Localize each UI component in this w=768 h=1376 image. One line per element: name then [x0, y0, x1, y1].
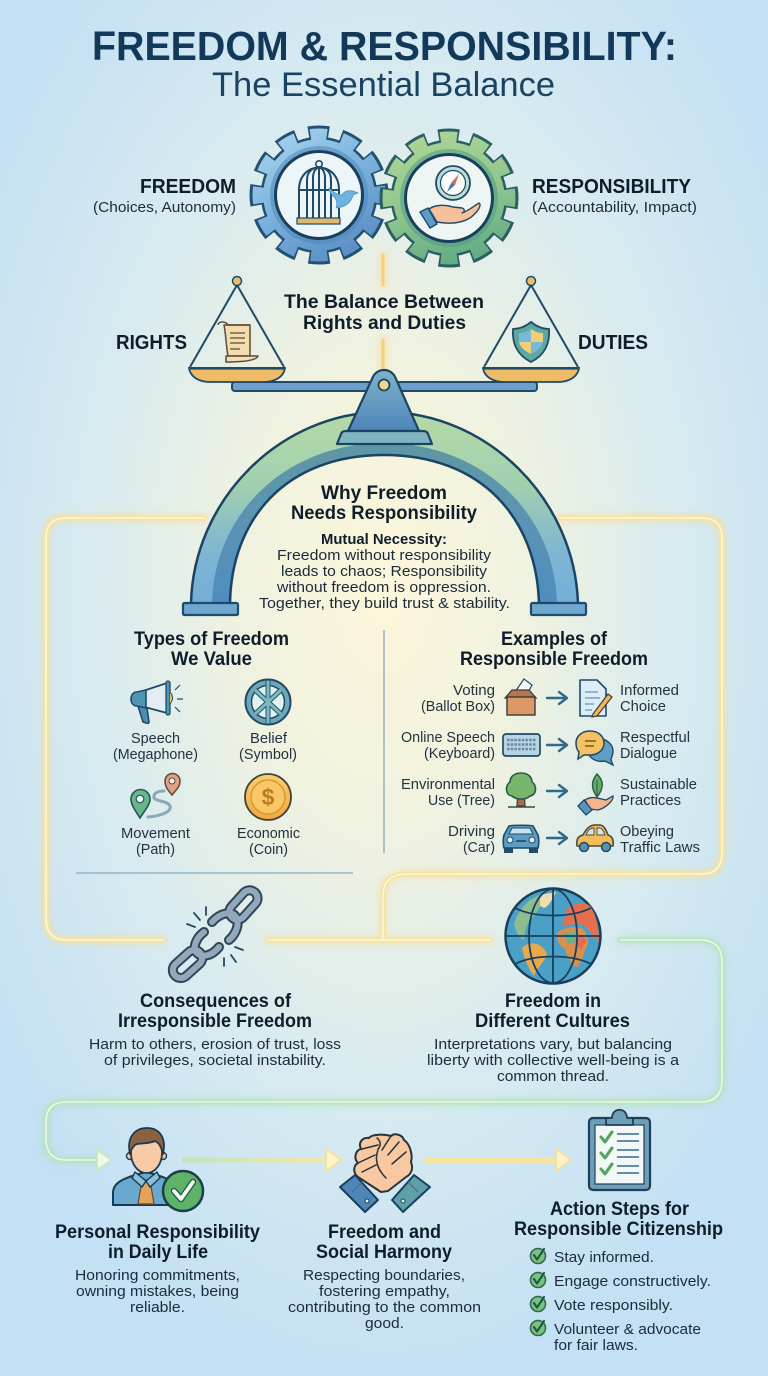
- icon: globe: [506, 888, 600, 984]
- row: driving: Traffic Laws: [620, 840, 700, 856]
- row: driving: (Car): [463, 840, 495, 856]
- text: why freedom needs responsibility: Together, they build trust & stability.: [259, 595, 510, 612]
- text: personal responsibility: owning mistakes, being: [76, 1283, 239, 1300]
- arch foot left: [183, 603, 238, 615]
- label: responsibility: [532, 176, 697, 216]
- text: freedom in different cultures: Different Cultures: [475, 1011, 630, 1032]
- panel: examples of responsible freedom: [401, 629, 700, 856]
- text: action steps: Responsible Citizenship: [514, 1219, 723, 1240]
- gear: freedom: [258, 134, 380, 256]
- right pan: [483, 276, 579, 382]
- title: FREEDOM & RESPONSIBILITY:: [92, 23, 677, 69]
- row: online speech: Respectful: [620, 730, 690, 746]
- checklist: Engage constructively.: [554, 1273, 711, 1290]
- label: movement: (Path): [136, 842, 175, 858]
- text: freedom and social harmony: contributing to the common: [288, 1299, 481, 1316]
- fulcrum: [337, 370, 432, 444]
- left pan: [189, 276, 285, 382]
- connector glow: green path and arrows: [46, 940, 722, 1171]
- label: movement: Movement: [121, 826, 190, 842]
- beam: [232, 382, 537, 391]
- text: freedom in different cultures: liberty with collective well-being is a: [427, 1052, 680, 1069]
- icon: coin: [245, 774, 291, 820]
- heading: Examples of: [501, 629, 608, 650]
- label: economic: Economic: [237, 826, 300, 842]
- text: why freedom needs responsibility: [259, 483, 510, 612]
- row: voting: Informed: [620, 683, 679, 699]
- row: voting: [421, 679, 679, 717]
- label: responsibility: RESPONSIBILITY: [532, 176, 692, 198]
- label: responsibility: (Accountability, Impact): [532, 199, 697, 216]
- checklist: Volunteer & advocate: [554, 1321, 701, 1338]
- row: driving: Obeying: [620, 824, 674, 840]
- text: why freedom needs responsibility: without freedom is oppression.: [276, 579, 491, 596]
- label: speech: [113, 731, 198, 763]
- text: personal responsibility: Personal Responsibility: [55, 1222, 260, 1243]
- row: online speech: (Keyboard): [424, 746, 495, 762]
- label: freedom: (Choices, Autonomy): [93, 199, 236, 216]
- row: voting: Voting: [453, 683, 495, 699]
- text: freedom and social harmony: Social Harmony: [316, 1242, 452, 1263]
- checklist: [530, 1248, 711, 1354]
- row: environmental use: Sustainable: [620, 777, 697, 793]
- checklist: Vote responsibly.: [554, 1297, 673, 1314]
- heading: balance: The Balance Between: [284, 292, 484, 313]
- text: freedom and social harmony: good.: [365, 1315, 404, 1332]
- icon: handshake: [340, 1134, 430, 1212]
- text: freedom in different cultures: Freedom in: [505, 991, 601, 1012]
- row: environmental use: Practices: [620, 793, 681, 809]
- heading: Types of Freedom: [134, 629, 289, 650]
- label: movement: [121, 826, 190, 858]
- icon: shield: [513, 322, 549, 362]
- title: The Essential Balance: [212, 66, 555, 104]
- connector glow: yellow paths: [46, 255, 722, 940]
- text: action steps: Action Steps for: [550, 1199, 690, 1220]
- text: consequences of irresponsible freedom: [89, 991, 341, 1069]
- heading: balance: Rights and Duties: [303, 313, 466, 334]
- text: consequences of irresponsible freedom: Irresponsible Freedom: [118, 1011, 312, 1032]
- icon: broken chain: [170, 887, 261, 981]
- icon: path with pins: [131, 774, 180, 818]
- text: action steps: [514, 1199, 723, 1354]
- label: economic: (Coin): [249, 842, 288, 858]
- row: driving: Driving: [448, 824, 495, 840]
- heading: We Value: [171, 649, 252, 670]
- checklist: for fair laws.: [554, 1337, 638, 1354]
- text: consequences of irresponsible freedom: of privileges, societal instability.: [104, 1052, 326, 1069]
- text: why freedom needs responsibility: Mutual Necessity:: [321, 531, 447, 548]
- text: consequences of irresponsible freedom: Consequences of: [140, 991, 292, 1012]
- label: freedom: [93, 176, 236, 216]
- text: consequences of irresponsible freedom: Harm to others, erosion of trust, loss: [89, 1036, 341, 1053]
- text: freedom and social harmony: fostering empathy,: [319, 1283, 450, 1300]
- label: speech: Speech: [131, 731, 180, 747]
- text: freedom and social harmony: [288, 1222, 481, 1332]
- icon: coin: $: [262, 784, 275, 810]
- icon: scroll: [218, 322, 258, 362]
- icon: birdcage with bird: [297, 161, 358, 224]
- text: personal responsibility: [55, 1222, 260, 1316]
- row: driving: [448, 824, 700, 856]
- label: speech: (Megaphone): [113, 747, 198, 763]
- text: why freedom needs responsibility: Freedom without responsibility: [277, 547, 492, 564]
- label: economic: [237, 826, 300, 858]
- text: why freedom needs responsibility: Why Freedom: [321, 483, 447, 504]
- row: online speech: Online Speech: [401, 730, 495, 746]
- text: why freedom needs responsibility: leads to chaos; Responsibility: [281, 563, 488, 580]
- label: belief: [239, 731, 297, 763]
- label: freedom: FREEDOM: [140, 176, 236, 198]
- text: personal responsibility: reliable.: [130, 1299, 185, 1316]
- icon: megaphone: [131, 681, 183, 723]
- icon: person with check badge: [113, 1128, 203, 1211]
- text: freedom in different cultures: common thread.: [497, 1068, 609, 1085]
- label: duties: DUTIES: [578, 332, 648, 354]
- label: belief: (Symbol): [239, 747, 297, 763]
- row: voting: Choice: [620, 699, 666, 715]
- row: online speech: Dialogue: [620, 746, 677, 762]
- text: personal responsibility: Honoring commitments,: [75, 1267, 240, 1284]
- text: freedom in different cultures: Interpretations vary, but balancing: [434, 1036, 672, 1053]
- title: [92, 23, 677, 104]
- label: belief: Belief: [250, 731, 288, 747]
- icon: compass over hand: [420, 166, 480, 228]
- heading: [460, 629, 648, 670]
- text: freedom and social harmony: Respecting boundaries,: [303, 1267, 465, 1284]
- icon: clipboard: [589, 1110, 650, 1190]
- panel: types of freedom: [113, 629, 300, 858]
- arch: [183, 412, 586, 615]
- heading: [134, 629, 289, 670]
- row: environmental use: Environmental: [401, 777, 495, 793]
- text: freedom in different cultures: [427, 991, 680, 1085]
- row: online speech: [401, 730, 690, 765]
- text: freedom and social harmony: Freedom and: [328, 1222, 441, 1243]
- text: personal responsibility: in Daily Life: [108, 1242, 208, 1263]
- icon: belief symbol: [246, 680, 290, 724]
- label: rights: RIGHTS: [116, 332, 187, 354]
- row: voting: (Ballot Box): [421, 699, 495, 715]
- arch foot right: [531, 603, 586, 615]
- heading: Responsible Freedom: [460, 649, 648, 670]
- heading: balance: [284, 292, 484, 334]
- balance scale: [189, 276, 579, 444]
- text: why freedom needs responsibility: Needs Responsibility: [291, 503, 477, 524]
- gear: responsibility: [388, 137, 510, 259]
- checklist: Stay informed.: [554, 1249, 654, 1266]
- row: environmental use: Use (Tree): [428, 793, 495, 809]
- row: environmental use: [401, 773, 697, 815]
